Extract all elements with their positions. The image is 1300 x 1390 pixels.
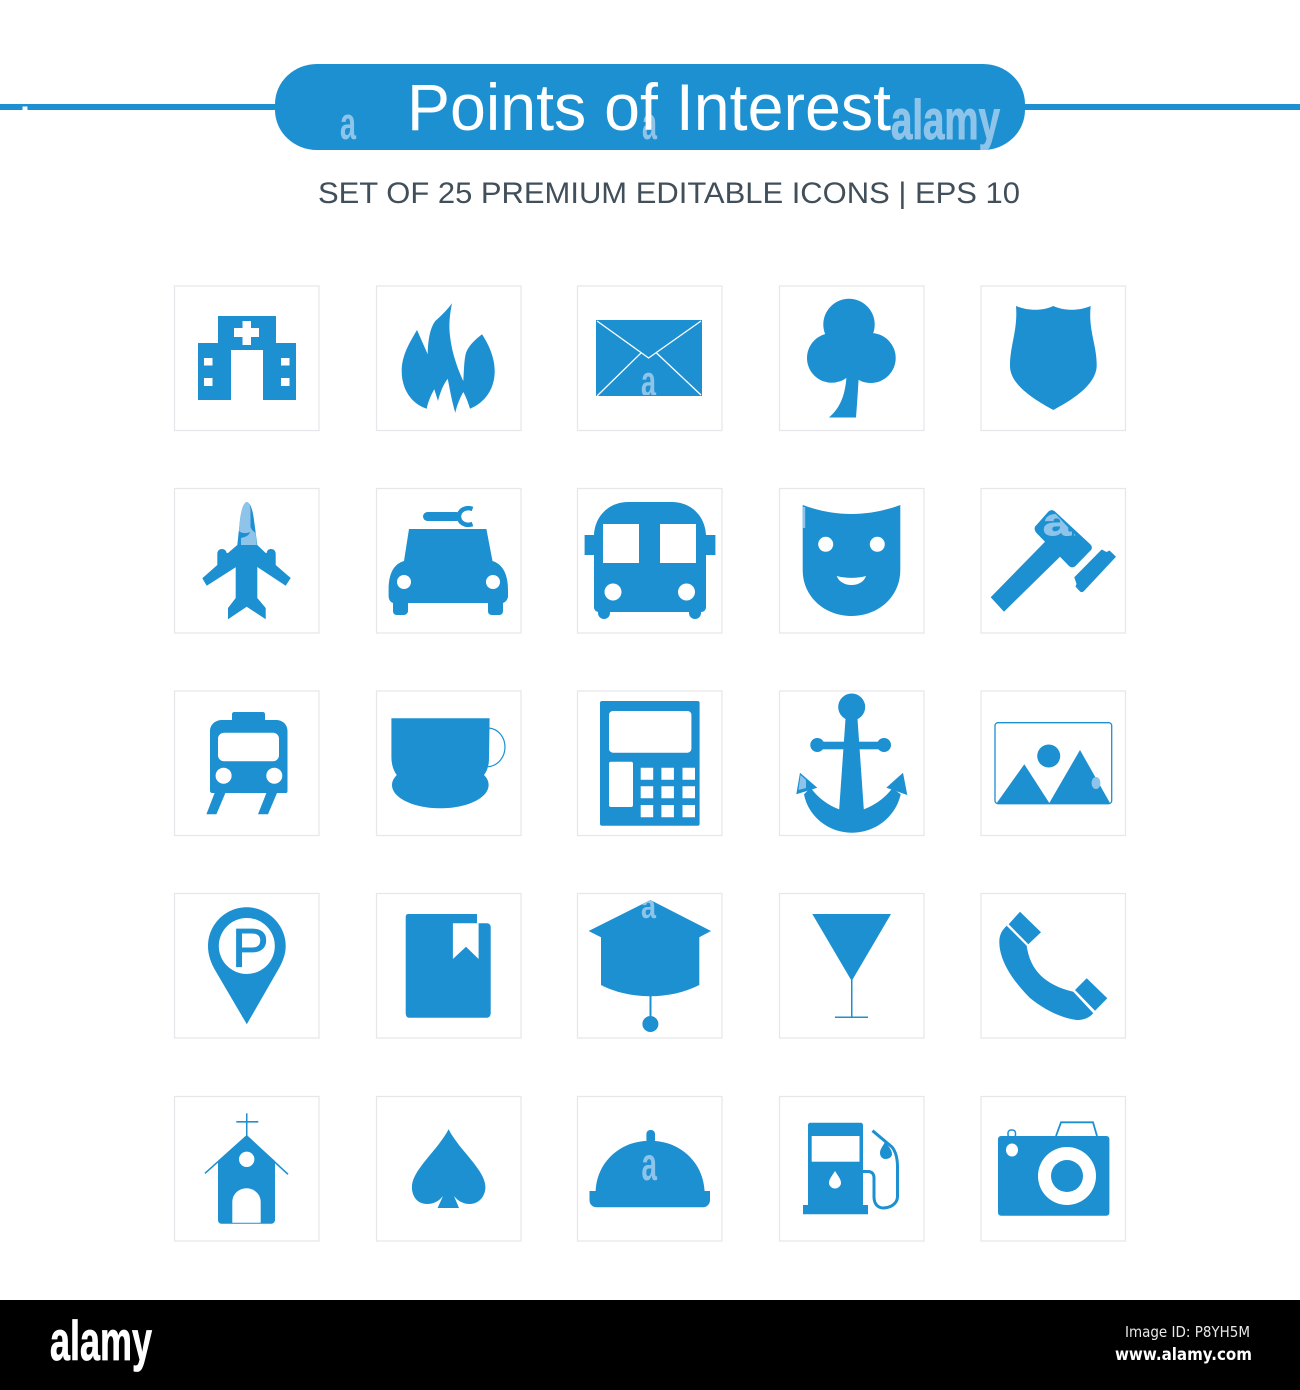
icon: anchor bbox=[780, 691, 924, 836]
title pill bbox=[275, 64, 1025, 150]
footer bar bbox=[0, 1300, 1300, 1390]
image id: Image ID: P8YH5M bbox=[1125, 1323, 1250, 1341]
pill watermarks: a bbox=[340, 98, 357, 149]
icon: camera bbox=[981, 1096, 1126, 1241]
website: www.alamy.com bbox=[1115, 1345, 1252, 1365]
icon: graduation cap: a bbox=[641, 888, 657, 926]
icon: bus bbox=[578, 488, 722, 633]
icon: envelope: a bbox=[641, 357, 656, 406]
pill watermarks: a bbox=[642, 98, 658, 149]
footer logo: alamy bbox=[50, 1309, 152, 1372]
icon: theater mask bbox=[780, 488, 924, 633]
title: Points of Interest bbox=[407, 70, 891, 144]
header bbox=[0, 64, 1300, 210]
icon: food cloche: a bbox=[642, 1138, 657, 1190]
icon: shield bbox=[981, 286, 1126, 430]
icon: fire bbox=[376, 286, 521, 430]
icon: train bbox=[174, 691, 319, 836]
pill watermarks bbox=[340, 98, 1000, 150]
pill watermarks: alamy bbox=[891, 88, 1000, 151]
icon: book with bookmark bbox=[376, 894, 521, 1038]
icon: airplane bbox=[174, 488, 319, 633]
icon: coffee cup bbox=[376, 691, 521, 836]
icon: graduation cap bbox=[578, 888, 722, 1038]
icon: parking pin bbox=[174, 894, 319, 1038]
icon: gavel bbox=[981, 488, 1126, 633]
header rule bbox=[0, 104, 1300, 110]
icon: spade bbox=[376, 1096, 521, 1241]
icon: food cloche bbox=[578, 1096, 722, 1241]
icon: car service bbox=[376, 488, 521, 633]
icon: parking pin: P bbox=[232, 916, 269, 978]
icon: envelope bbox=[578, 286, 722, 430]
icon: picture bbox=[981, 691, 1126, 836]
icon: gavel: al bbox=[1043, 502, 1085, 544]
icon: church bbox=[174, 1096, 319, 1241]
icon: hospital bbox=[174, 286, 319, 430]
icon: calculator bbox=[578, 691, 722, 836]
icon: cocktail glass bbox=[780, 894, 924, 1038]
icon: tree bbox=[780, 286, 924, 430]
icon: gas pump bbox=[780, 1096, 924, 1241]
subtitle: SET OF 25 PREMIUM EDITABLE ICONS | EPS 10 bbox=[318, 177, 1020, 210]
watermark on rule: alamy bbox=[0, 100, 102, 138]
icon: phone bbox=[981, 894, 1126, 1038]
